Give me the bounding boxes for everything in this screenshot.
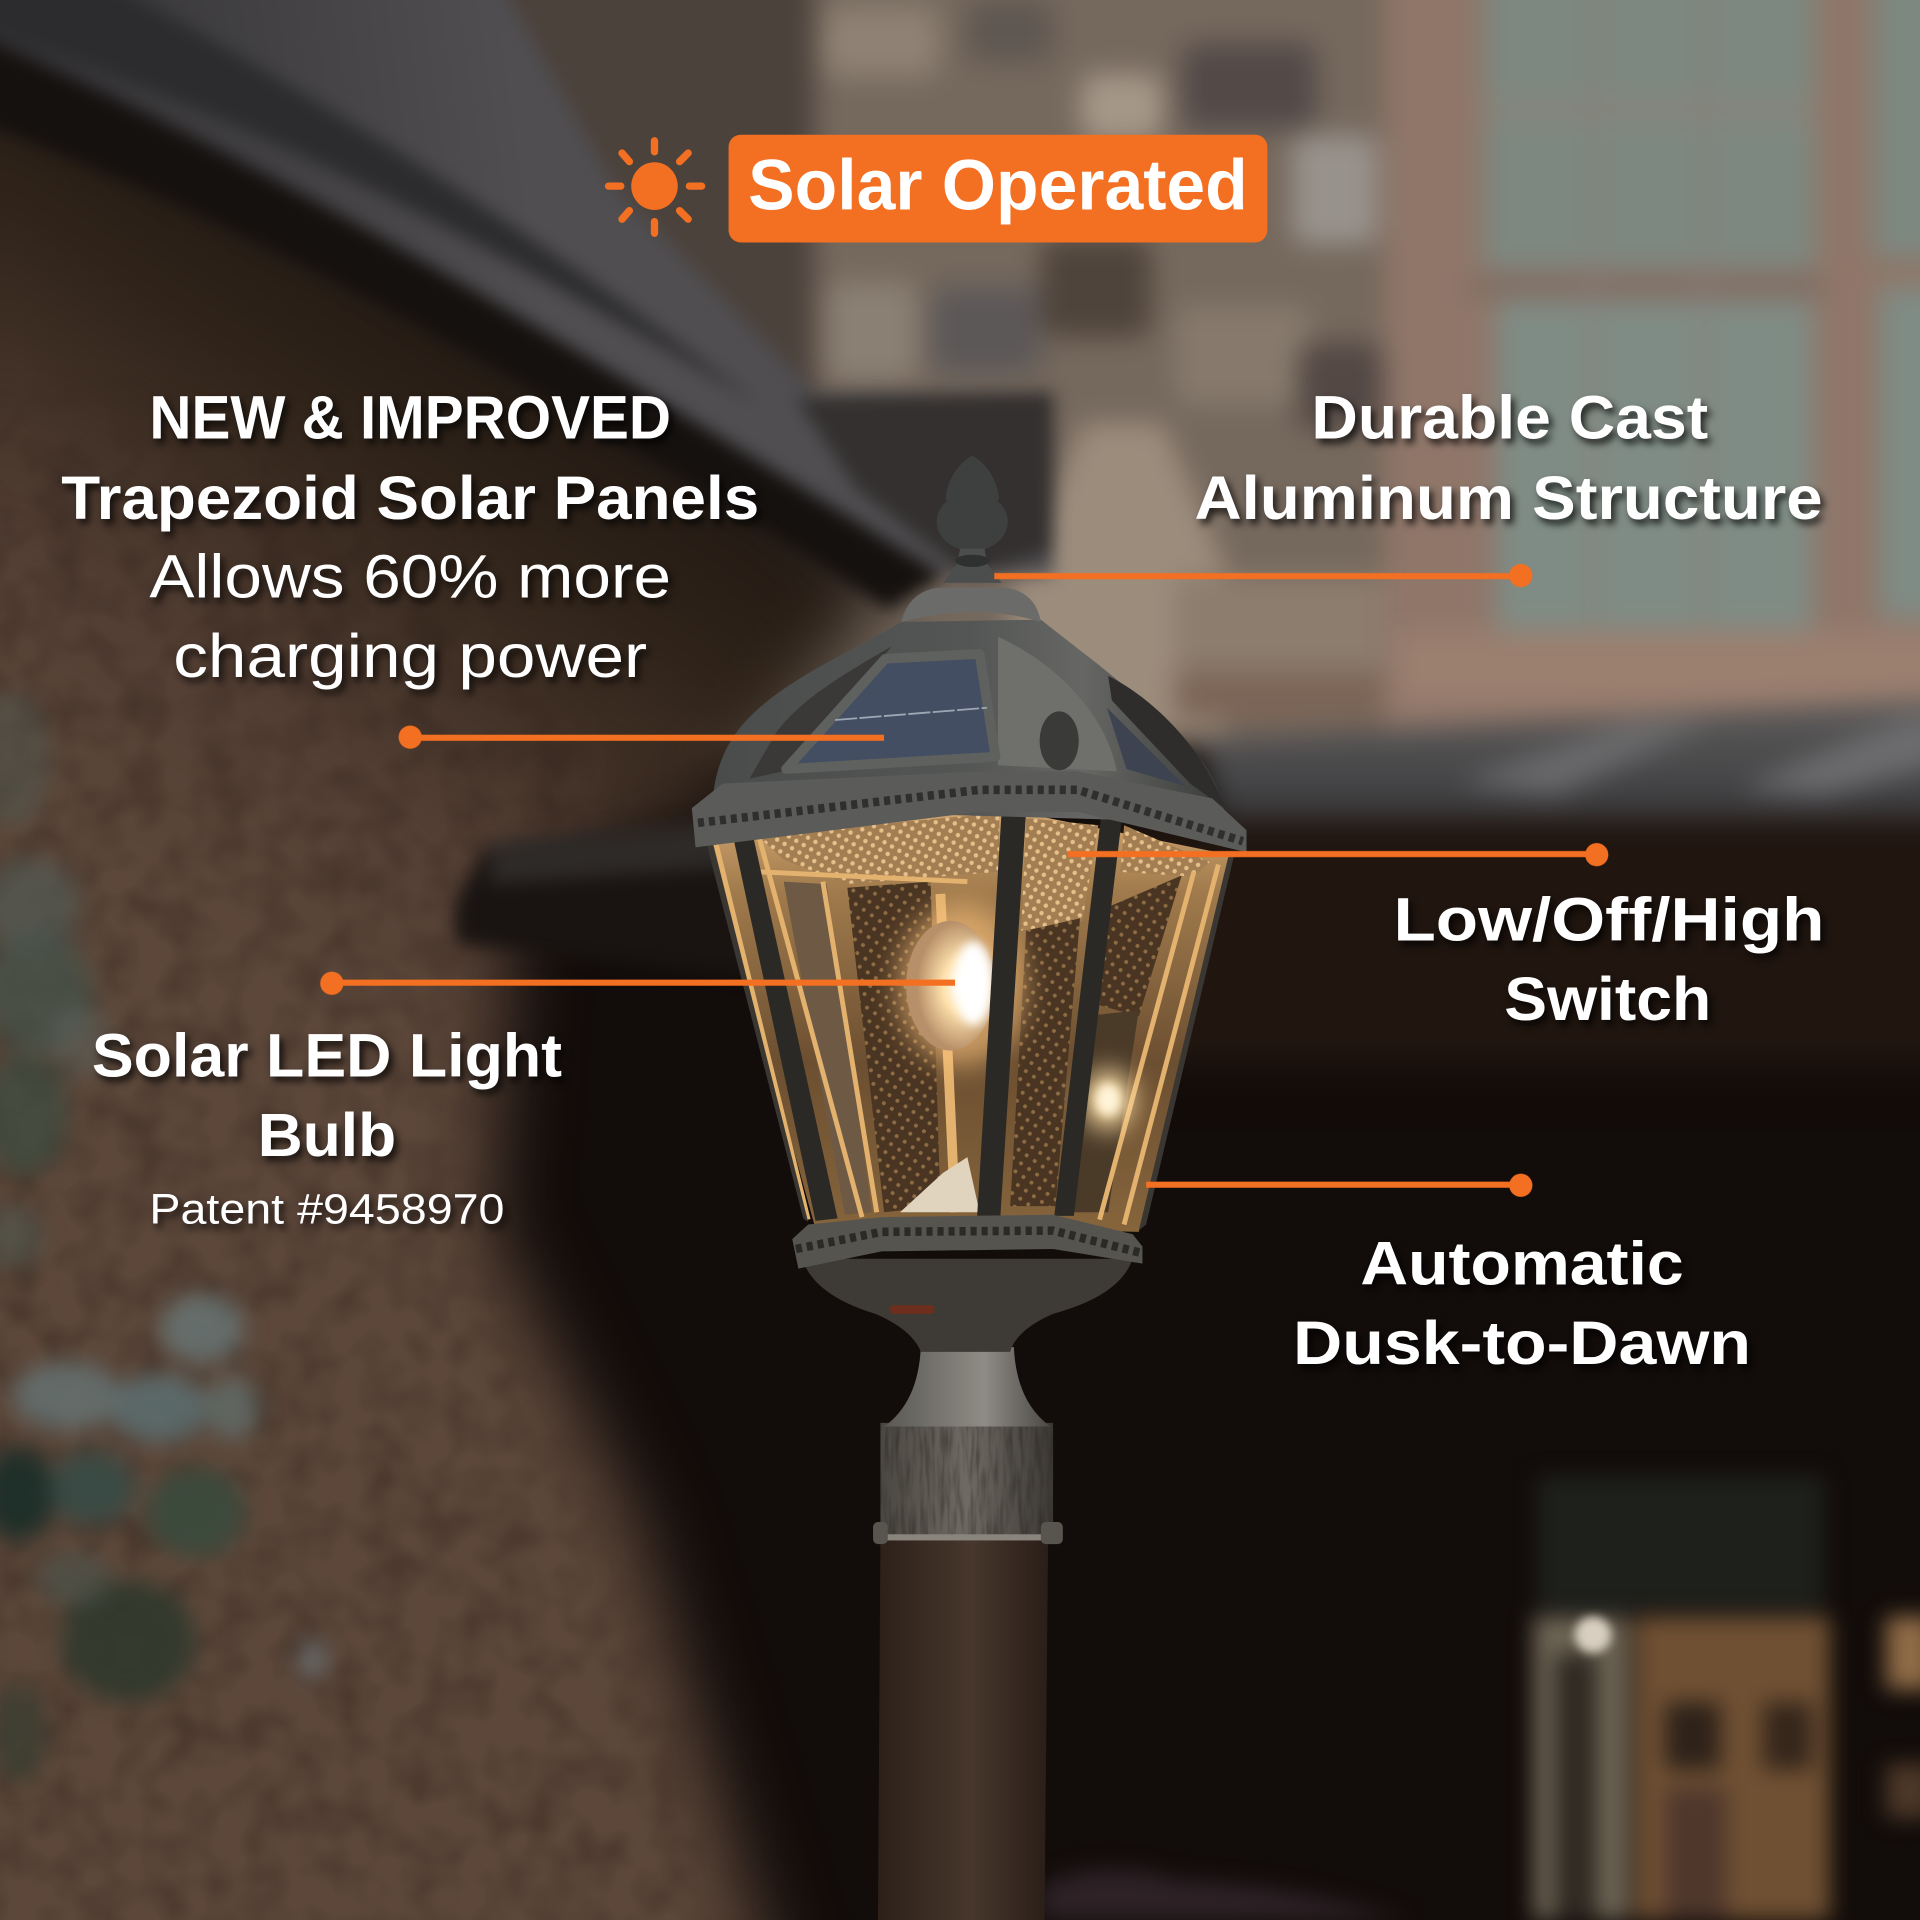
LED bulb (898, 905, 1025, 1067)
beaded band (692, 771, 1247, 852)
callout: automatic dusk to dawn (1293, 1229, 1751, 1377)
lit window at lower right (1041, 1476, 1920, 1920)
lamp post (692, 456, 1247, 1920)
callout: durable cast aluminum (1194, 383, 1823, 532)
callout: solar LED bulb: Bulb (258, 1101, 396, 1169)
overhang (1102, 820, 1920, 1071)
callout: automatic dusk to dawn: Dusk-to-Dawn (1293, 1309, 1751, 1377)
lit glass body (708, 808, 1229, 1232)
metal roof (1200, 698, 1920, 845)
leader line: LED bulb (320, 972, 955, 995)
callout: trapezoid solar panels: Trapezoid Solar Panels (61, 464, 759, 532)
brick wall (0, 0, 894, 1920)
callout: solar LED bulb (92, 1021, 562, 1233)
lamp base (802, 1259, 1133, 1352)
icon: sun (609, 141, 702, 233)
callout: automatic dusk to dawn: Automatic (1360, 1229, 1684, 1297)
callout: trapezoid solar panels (61, 383, 759, 690)
callout: low off high switch (1393, 885, 1824, 1033)
callout: low off high switch: Switch (1504, 965, 1711, 1033)
callout: trapezoid solar panels: charging power (173, 622, 647, 690)
callout: low off high switch: Low/Off/High (1393, 885, 1824, 953)
dark frame bars (707, 811, 1234, 1231)
bottom beaded band (792, 1215, 1142, 1269)
leader line: switch (1068, 843, 1608, 866)
garden shrub (0, 692, 327, 1782)
callout: durable cast aluminum: Aluminum Structure (1194, 464, 1823, 532)
badge label (729, 135, 1267, 242)
leader line: solar panels (399, 726, 884, 749)
callout: solar LED bulb: Patent #9458970 (149, 1185, 504, 1233)
badge label: Solar Operated (748, 146, 1248, 225)
eave over doorway (456, 820, 784, 980)
stone wall (465, 0, 1445, 747)
window (1384, 0, 1920, 735)
finial (937, 456, 1008, 583)
brick mottling (0, 470, 680, 1920)
leader line: aluminum structure (994, 564, 1532, 587)
collar (901, 588, 1041, 622)
neck (884, 1347, 1051, 1427)
solar panel (786, 654, 996, 769)
gold inner frames (716, 838, 1218, 1224)
solar operated badge (609, 135, 1267, 242)
second solar panel (1107, 708, 1185, 786)
leader line: dusk to dawn (1146, 1174, 1532, 1197)
callout: trapezoid solar panels: NEW & IMPROVED (149, 383, 671, 451)
pole sleeve (873, 1423, 1063, 1544)
small bulb glow (1084, 1070, 1133, 1129)
callout: solar LED bulb: Solar LED Light (92, 1021, 562, 1089)
dome (713, 620, 1227, 823)
callout: trapezoid solar panels: Allows 60% more (149, 543, 671, 611)
shingled roof (0, 0, 1053, 576)
callout: durable cast aluminum: Durable Cast (1311, 383, 1708, 451)
reflector panels (757, 813, 999, 884)
pole (878, 1537, 1048, 1920)
base lamp reflection (900, 1157, 980, 1212)
